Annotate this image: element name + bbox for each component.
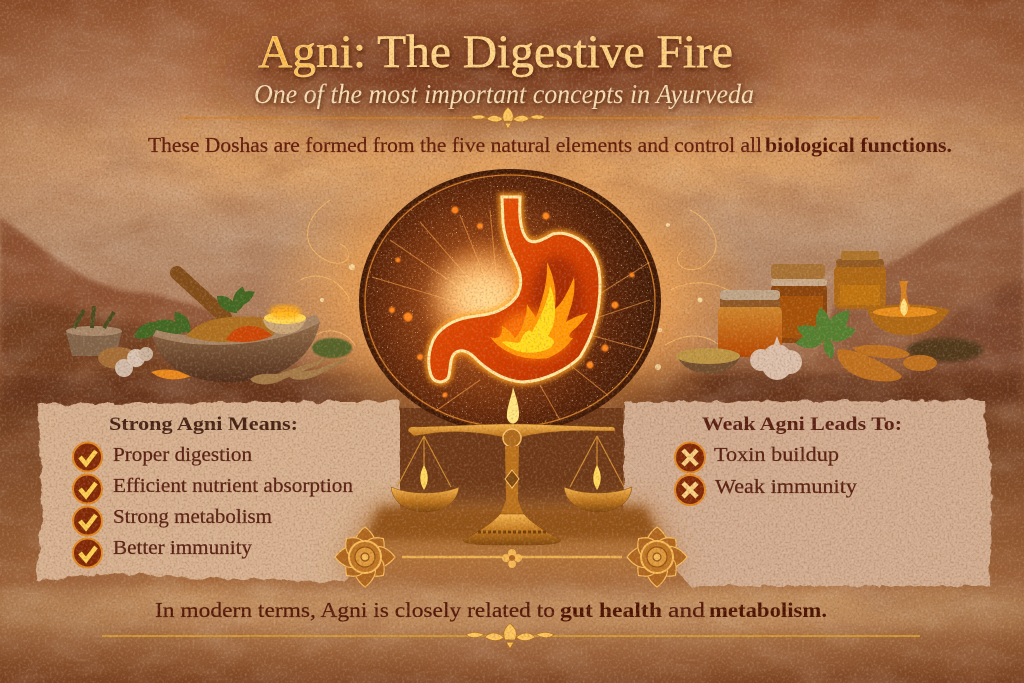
heading: weak agni: Weak Agni Leads To: — [702, 414, 902, 435]
central plinth behind the scale — [340, 408, 680, 575]
flame — [490, 262, 588, 359]
center boss — [503, 429, 521, 447]
item: weak immunity — [675, 475, 857, 505]
left pan — [391, 436, 459, 512]
item: nutrient absorption: Efficient nutrient absorption — [113, 476, 353, 497]
intro sentence: These Doshas are formed from the five natural elements and control all — [148, 133, 762, 157]
mint leaves — [794, 305, 858, 360]
herbs and mortar group — [66, 273, 352, 384]
closing sentence: and — [668, 598, 706, 622]
disc body — [361, 171, 659, 431]
garlic bulb — [750, 336, 802, 380]
golden swirls and sparkles around the disc — [300, 200, 745, 370]
tall jar — [834, 251, 886, 309]
panel: weak agni — [624, 400, 991, 586]
closing sentence: metabolism. — [709, 598, 827, 622]
panel: strong agni — [36, 401, 402, 582]
small herb pot — [66, 306, 122, 356]
item: nutrient absorption — [73, 474, 353, 504]
dark herbs — [907, 338, 983, 362]
right pan — [564, 436, 632, 512]
title: Agni: The Digestive Fire — [258, 26, 733, 78]
closing sentence: gut health — [560, 598, 662, 622]
stomach — [429, 197, 600, 382]
balance scale — [391, 387, 632, 545]
mountains — [0, 188, 1024, 400]
left mandala — [335, 527, 395, 587]
parchment — [624, 400, 991, 586]
jars and spices group — [676, 251, 983, 382]
leaves — [131, 285, 258, 343]
garlic and turmeric — [98, 347, 192, 379]
parchment — [36, 401, 402, 582]
heading: strong agni: Strong Agni Means: — [109, 414, 298, 435]
ground strip — [0, 374, 1024, 406]
item: proper digestion — [73, 442, 252, 472]
center flower — [502, 549, 522, 568]
base — [463, 514, 561, 545]
item: strong metabolism: Strong metabolism — [113, 507, 272, 528]
item: strong metabolism — [73, 506, 272, 536]
turmeric roots — [837, 345, 937, 382]
beam — [408, 424, 615, 445]
inner ring — [365, 175, 655, 427]
green herbs — [312, 338, 352, 358]
item: better immunity — [73, 538, 252, 568]
central disc — [360, 170, 660, 432]
glow behind stomach — [440, 262, 524, 330]
item: proper digestion: Proper digestion — [113, 445, 252, 466]
check list — [73, 442, 353, 568]
item: toxin buildup — [675, 442, 839, 472]
item: toxin buildup: Toxin buildup — [714, 445, 839, 466]
top divider — [180, 108, 880, 128]
closing sentence — [155, 598, 827, 622]
cork jar — [771, 264, 827, 343]
stone bowl — [153, 314, 320, 382]
subtitle: One of the most important concepts in Ayurveda — [254, 79, 754, 109]
wooden spoons — [250, 358, 347, 384]
rising flame — [507, 387, 519, 424]
honey jar — [718, 290, 782, 357]
candle dish — [263, 305, 306, 334]
column — [500, 446, 524, 516]
oil lamp — [867, 281, 950, 335]
small spice bowl — [676, 348, 741, 374]
light rays and sparks — [360, 170, 660, 432]
glow around the central disc — [260, 147, 760, 443]
bottom divider — [102, 624, 920, 648]
pestle — [177, 273, 225, 317]
item: better immunity: Better immunity — [113, 538, 252, 559]
right mandala — [627, 527, 687, 587]
ornamental mandala rule — [335, 527, 687, 587]
intro sentence: biological functions. — [765, 133, 952, 157]
item: weak immunity: Weak immunity — [715, 477, 857, 498]
closing sentence: In modern terms, Agni is closely related to — [155, 598, 555, 622]
